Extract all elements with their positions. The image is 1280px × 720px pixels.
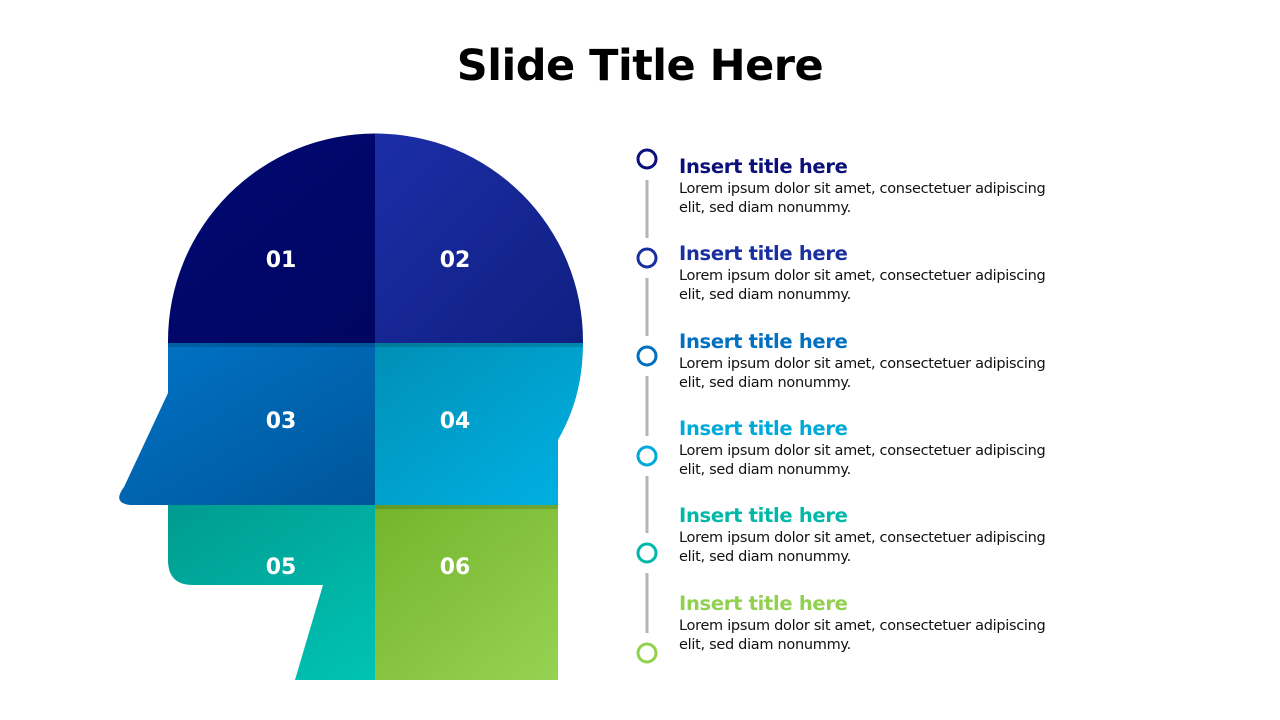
item 2	[679, 242, 1045, 303]
item 6	[679, 592, 1045, 653]
cell 03: 03	[266, 409, 296, 434]
cell 01: 01	[266, 248, 296, 273]
item 2: Lorem ipsum dolor sit amet, consectetuer adipiscing elit, sed diam nonummy.	[679, 268, 1045, 303]
item 1	[679, 155, 1045, 216]
cell 02: 02	[440, 248, 470, 273]
item 2: Insert title here	[679, 242, 848, 265]
item 3: Lorem ipsum dolor sit amet, consectetuer adipiscing elit, sed diam nonummy.	[679, 356, 1045, 391]
cell 06	[375, 505, 558, 680]
cell 06: 06	[440, 555, 470, 580]
title: Slide Title Here	[457, 41, 823, 91]
item 5: Lorem ipsum dolor sit amet, consectetuer adipiscing elit, sed diam nonummy.	[679, 530, 1045, 565]
item 1: Insert title here	[679, 155, 848, 178]
cell 02	[375, 134, 583, 343]
item 6: Lorem ipsum dolor sit amet, consectetuer adipiscing elit, sed diam nonummy.	[679, 618, 1045, 653]
cell 04	[375, 343, 595, 505]
item 3	[679, 330, 1045, 391]
cell 05: 05	[266, 555, 296, 580]
cell 01	[168, 134, 375, 343]
timeline	[636, 148, 658, 664]
cell 03	[100, 343, 375, 505]
item 5: Insert title here	[679, 504, 848, 527]
item 3: Insert title here	[679, 330, 848, 353]
cell 04: 04	[440, 409, 470, 434]
item 5	[679, 504, 1045, 565]
head diagram	[119, 134, 583, 680]
cell 05	[168, 505, 375, 680]
item 4: Insert title here	[679, 417, 848, 440]
item 1: Lorem ipsum dolor sit amet, consectetuer adipiscing elit, sed diam nonummy.	[679, 181, 1045, 216]
item 4: Lorem ipsum dolor sit amet, consectetuer adipiscing elit, sed diam nonummy.	[679, 443, 1045, 478]
item 6: Insert title here	[679, 592, 848, 615]
item 4	[679, 417, 1045, 478]
